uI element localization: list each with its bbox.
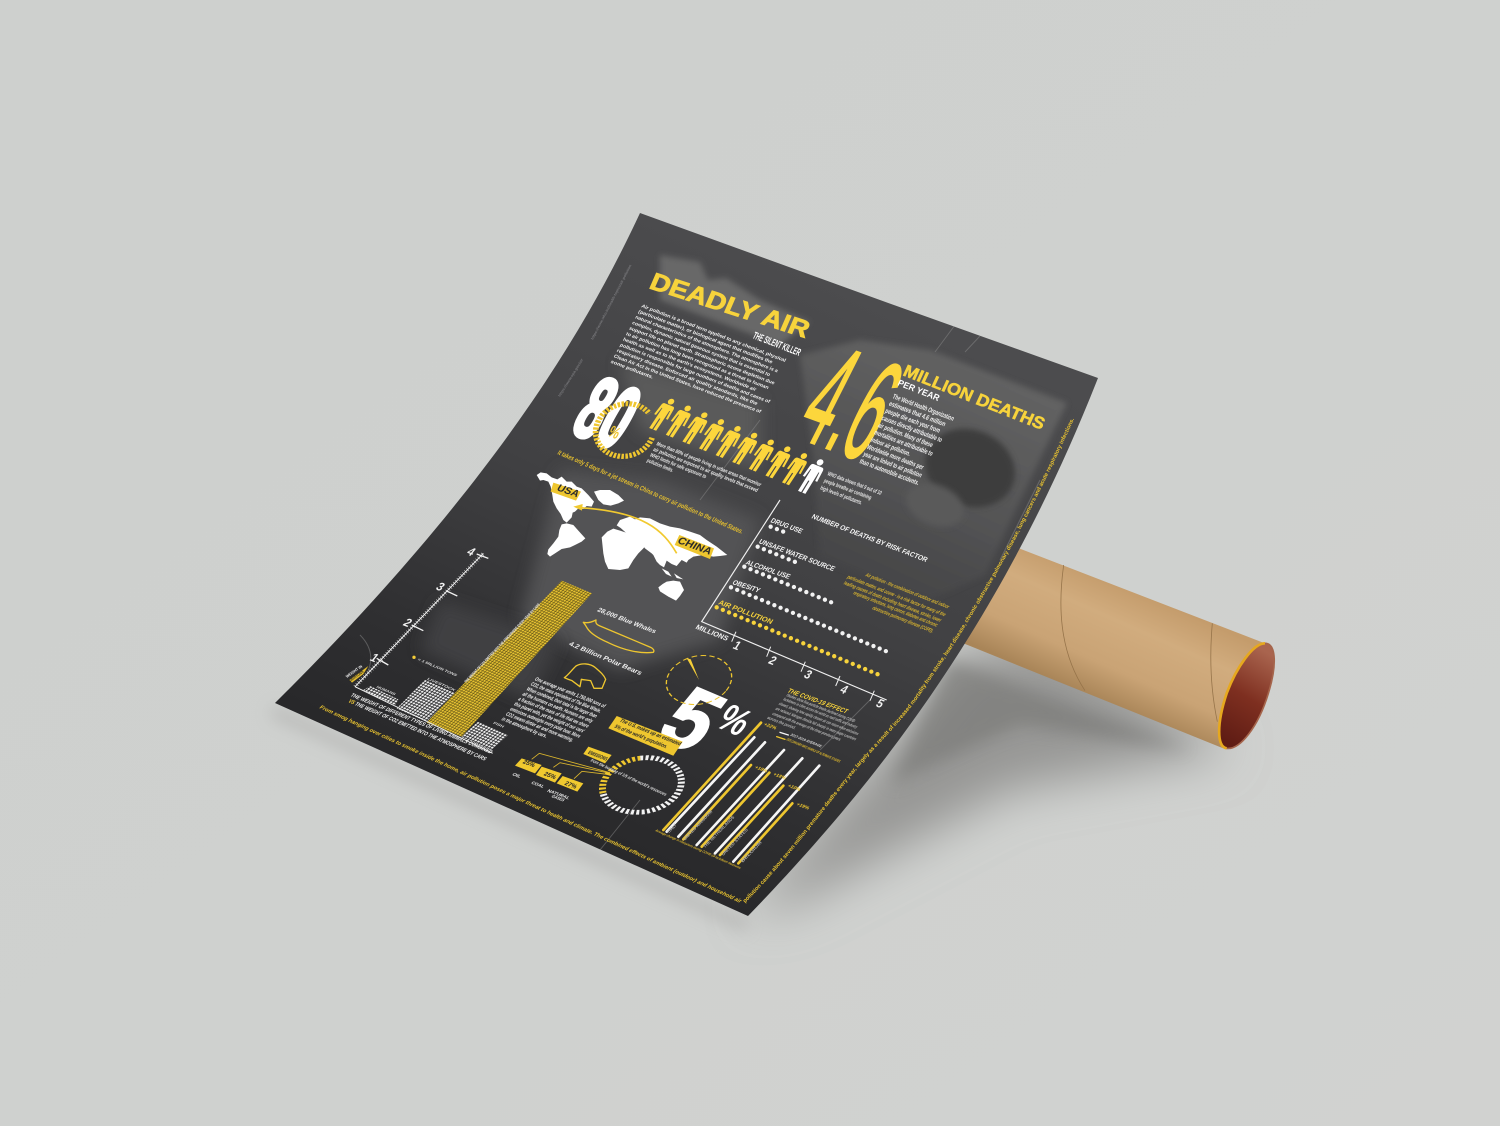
- WHO deaths paragraph: people die each year from: [884, 408, 941, 435]
- million deaths heading: MILLION DEATHS: [900, 361, 1048, 434]
- country labels: [666, 809, 763, 863]
- fuel labels: NATURAL: [545, 789, 571, 801]
- car emissions paragraph: [500, 677, 607, 750]
- paper base: [275, 213, 1098, 916]
- big number 5 percent: 5: [641, 669, 744, 770]
- US share callout: [608, 716, 683, 756]
- urban air text: WHO limits for safe exposure to: [648, 453, 708, 480]
- x-axis numbers: 1: [730, 638, 744, 653]
- bar labels: [345, 602, 541, 729]
- x-axis numbers: 3: [801, 667, 815, 682]
- country labels: THE NETHERLANDS: [702, 815, 735, 849]
- axis numbers: 4: [464, 545, 479, 559]
- car emissions paragraph: all the humans on earth. Humans are only: [521, 692, 594, 725]
- chart: deaths by risk factor: [694, 500, 930, 711]
- fuel labels: COAL: [529, 781, 546, 789]
- WHO deaths paragraph: air pollution. Many of these: [876, 422, 934, 449]
- legend text: 2017-2019 AVERAGE: [789, 732, 824, 748]
- gauge 80 percent: [585, 395, 665, 465]
- WHO deaths paragraph: estimates that 4.6 million: [887, 401, 947, 428]
- chart caption: VS THE WEIGHT OF CO2 EMITTED INTO THE ATMOSPHERE BY CARS: [346, 698, 488, 762]
- intro paragraph: to air pollution has long been recognized as a threat to human: [625, 331, 770, 391]
- title: DEADLY AIR: [646, 269, 814, 344]
- US share callout: The U.S. makes up an estimated: [618, 718, 682, 747]
- COVID-19 effect text: are reduced. Nitrogen dioxide fell sharply in many major countries: [774, 706, 858, 741]
- background smoke and photo: [420, 255, 1067, 700]
- WHO deaths paragraph: [858, 394, 955, 488]
- x-axis numbers: 5: [873, 696, 887, 711]
- car emissions paragraph: this planet with, yet the weight of our cars': [512, 702, 586, 735]
- chart: weight of animals vs CO2: [345, 545, 592, 762]
- whale and bear comparison: [564, 607, 658, 688]
- China label: CHINA: [675, 536, 714, 557]
- bottom edge sentence: From smog hanging over cities to smoke inside the home, air pollution poses a major threat to health and climate. The combined effects of ambient (outdoor) and household air: [318, 705, 743, 905]
- COVID-19 effect text: Studies show fine particle levels declined during COVID: [785, 693, 857, 723]
- legend text: 2020 (JANUARY-MAY) SAMPLE OF ALTERNATE STUDIES: [785, 737, 842, 763]
- air pollution definition: [842, 573, 951, 634]
- x-axis numbers: 2: [766, 653, 780, 668]
- axis numbers: 1: [367, 651, 382, 665]
- percentage values: 27%: [563, 780, 578, 790]
- axis numbers: 2: [400, 616, 415, 630]
- whale and bear comparison: 4.2 Billion Polar Bears: [567, 641, 644, 677]
- risk labels: DRUG USE: [769, 516, 805, 535]
- WHO deaths paragraph: Worldwide more deaths per: [865, 444, 925, 471]
- WHO deaths paragraph: mortalities are attributable to: [873, 430, 934, 458]
- continents: [537, 472, 727, 601]
- tube seams: [1061, 565, 1217, 722]
- country labels: UNITED KINGDOM: [682, 809, 714, 841]
- risk labels: OBESITY: [731, 578, 762, 594]
- 9 of 10 note: [819, 471, 883, 511]
- US share callout: 5% of the world's population.: [613, 724, 669, 750]
- car emissions paragraph: One average year emits 1,750,000 tons of: [533, 677, 607, 709]
- ring caption: from the burning of 1/5 of the world's resources: [589, 758, 668, 797]
- WHO deaths paragraph: The World Health Organization: [891, 394, 955, 423]
- x-axis numbers: [730, 638, 887, 711]
- intro paragraph: Air pollution is a broad term applied to any chemical, physical: [640, 304, 788, 364]
- air pollution definition: obstructive pulmonary disease (COPD).: [870, 606, 935, 634]
- car emissions paragraph: When combined, their total is far larger than: [525, 687, 598, 719]
- COVID-19 effect text: slowed, showing how rapidly cleaner air can return when emissions: [778, 701, 860, 736]
- white average lines: [667, 737, 819, 862]
- percentage labels: +19%: [795, 802, 811, 811]
- people row: 9 of 10: [646, 396, 829, 495]
- margin source notes: [557, 264, 633, 398]
- bar labels: GIGATONS: [348, 669, 365, 683]
- axis numbers: 3: [433, 580, 448, 594]
- risk labels: [694, 516, 837, 643]
- country labels: UNITED STATES: [720, 827, 749, 857]
- percentage labels: +22%: [762, 722, 778, 731]
- legend swatches: [780, 732, 788, 735]
- car emissions paragraph: emissions outweighs every polar bear. More: [508, 707, 582, 740]
- air pollution definition: respiratory infections, lung cancer, diabetes and chronic: [851, 591, 939, 628]
- WHO deaths paragraph: causes directly attributable to: [880, 415, 943, 444]
- percentage values: EMISSIONS: [586, 750, 609, 762]
- margin source notes: https://www.who.int/health-topics/air-pollution: [590, 264, 633, 340]
- jet stream sentence: It takes only 5 days for a jet stream in China to carry air pollution to the United States.: [556, 450, 744, 535]
- intro paragraph: some pollutants.: [609, 359, 655, 381]
- percentage labels: +10%: [786, 783, 802, 793]
- jet stream arrow: [573, 504, 677, 553]
- COVID-19 effect text: lockdowns in cities across the world as road traffic and industry: [782, 697, 859, 729]
- weight axis: [355, 553, 493, 753]
- percentage labels: +18%: [771, 772, 788, 781]
- intro paragraph: Clean Air Act in the United States, have reduced the presence of: [612, 354, 762, 415]
- car emissions paragraph: in the atmosphere by cars.: [500, 717, 548, 739]
- urban air text: [645, 442, 763, 505]
- bar labels: FISH: [492, 721, 506, 729]
- COVID-19 effect text: compared with the average of the three previous years: [771, 711, 842, 742]
- WHO deaths paragraph: than to automobile accidents.: [858, 458, 920, 487]
- chart heading: NUMBER OF DEATHS BY RISK FACTOR: [810, 513, 930, 564]
- percentage labels: +18%: [753, 765, 769, 774]
- big number 80: 80: [559, 359, 655, 467]
- chart caption: THE WEIGHT OF DIFFERENT TYPES OF LIVING ANIMALS COMBINED: [349, 692, 494, 755]
- whale and bear outlines: [564, 620, 654, 688]
- risk labels: UNSAFE WATER SOURCE: [757, 537, 837, 573]
- world map: [537, 472, 727, 601]
- intro paragraph: health as well as to the earth's ecosystems. Worldwide air: [622, 337, 757, 393]
- poster sheet: [275, 213, 1098, 916]
- bar labels: THE WEIGHT OF CO2 EMITTED INTO THE ATMOSPHERE EVERY YEAR BY CARS: [463, 602, 541, 684]
- legend text: [785, 732, 842, 763]
- percentage boxes: [515, 758, 542, 773]
- shadow under poster and tube: [270, 640, 1230, 932]
- yellow 2020 lines: [663, 723, 792, 863]
- bar labels: = 1 MILLION TONS: [417, 657, 459, 677]
- resource ring: [587, 748, 697, 822]
- tube body: [922, 531, 1265, 748]
- chart: COVID emission change: [654, 722, 842, 870]
- urban air text: More than 80% of people living in urban areas that monitor: [655, 442, 763, 488]
- percentage labels: [753, 722, 811, 811]
- COVID-19 effect text: [766, 687, 860, 742]
- WHO deaths paragraph: year are linked to air pollution: [862, 451, 923, 479]
- risk labels: MILLIONS: [694, 623, 731, 643]
- intro paragraph: complex, dynamic natural gaseous system that is essential to: [631, 320, 771, 378]
- USA label: USA: [554, 483, 582, 500]
- per year label: PER YEAR: [896, 378, 942, 403]
- subtitle: THE SILENT KILLER: [751, 331, 803, 359]
- gauge 80 percent: %: [605, 422, 624, 443]
- white and yellow grid bars: [363, 686, 398, 706]
- cardboard tube: [922, 531, 1274, 748]
- big number 4.6: 4.6: [779, 317, 923, 490]
- car emissions paragraph: a fraction of the mass of life that we share: [516, 697, 590, 730]
- 9 of 10 note: high levels of pollutants.: [819, 486, 863, 506]
- COVID-19 effect text: across the period.: [766, 715, 797, 730]
- urban air text: pollution limits.: [645, 458, 675, 474]
- 9 of 10 note: WHO data shows that 9 out of 10: [826, 471, 883, 497]
- dashed gauge 5 percent: [653, 647, 745, 713]
- chart caption: [346, 692, 494, 762]
- percentage values: 25%: [521, 759, 537, 769]
- intro paragraph: pollution is responsible for large numbers of deaths and cases of: [619, 342, 771, 405]
- country labels: ITALY: [666, 823, 678, 834]
- COVID-19 effect text: THE COVID-19 EFFECT: [785, 687, 851, 715]
- bar labels: HUMANS: [375, 685, 398, 696]
- country labels: BELGIUM: [740, 839, 763, 863]
- axis numbers: [367, 545, 479, 665]
- percentage values: 25%: [542, 771, 558, 781]
- paper wrinkles: [360, 325, 1040, 850]
- intro paragraph: respiratory disease. Enforced air quality standards, like the: [615, 348, 759, 407]
- intro paragraph: (particulate matter), or biological agent that modifies the: [637, 309, 774, 365]
- intro paragraph: support life on planet earth. Stratospheric ozone depletion due: [628, 326, 776, 386]
- connector lines: [532, 753, 610, 779]
- x-axis numbers: 4: [837, 682, 852, 697]
- car emissions paragraph: CO2 means dirtier air and more warming.: [504, 712, 575, 743]
- right edge sentence: pollution cause about seven million premature deaths every year, largely as a result of increased mortality from stroke, heart disease, chronic obstructive pulmonary disease, lung cancers and acute respiratory infections.: [743, 419, 1074, 904]
- margin source notes: https://www.epa.gov/air: [557, 357, 585, 398]
- risk labels: AIR POLLUTION: [717, 598, 775, 626]
- tube opening: [1219, 643, 1274, 748]
- WHO deaths paragraph: indoor air pollution.: [869, 437, 912, 458]
- 9 of 10 note: people breathe air containing: [823, 479, 872, 501]
- fuel labels: GASES: [550, 794, 566, 803]
- fuel labels: [510, 772, 571, 803]
- bar labels: WEIGHT IN: [345, 664, 363, 679]
- air pollution definition: Air pollution - the combination of outdoor and indoor: [864, 573, 951, 610]
- air pollution definition: particulate matter, and ozone - is a risk factor for many of the: [845, 575, 947, 618]
- axes and dot rows: [702, 500, 887, 701]
- fuel labels: OIL: [510, 772, 523, 779]
- air pollution definition: leading causes of death including heart disease, stroke, lower: [842, 581, 943, 624]
- car emissions paragraph: CO2, the mass equivalent of The Blue Whale.: [529, 682, 603, 714]
- risk labels: ALCOHOL USE: [744, 558, 792, 581]
- chart footnote: Average change in emissions during COVID-19 lockdown measures: [654, 829, 742, 870]
- fossil fuel emissions: [510, 747, 697, 822]
- intro paragraph: natural characteristics of the atmosphere. The atmosphere is a: [634, 315, 779, 374]
- percentage values: [521, 750, 609, 790]
- big number 5 percent: %: [709, 696, 761, 744]
- intro paragraph: [609, 304, 793, 422]
- bar labels: LIVESTOCK: [426, 677, 457, 692]
- urban air text: air pollution are exposed to air quality levels that exceed: [652, 447, 759, 494]
- comparison labels: 28,000 Blue Whales: [595, 607, 658, 635]
